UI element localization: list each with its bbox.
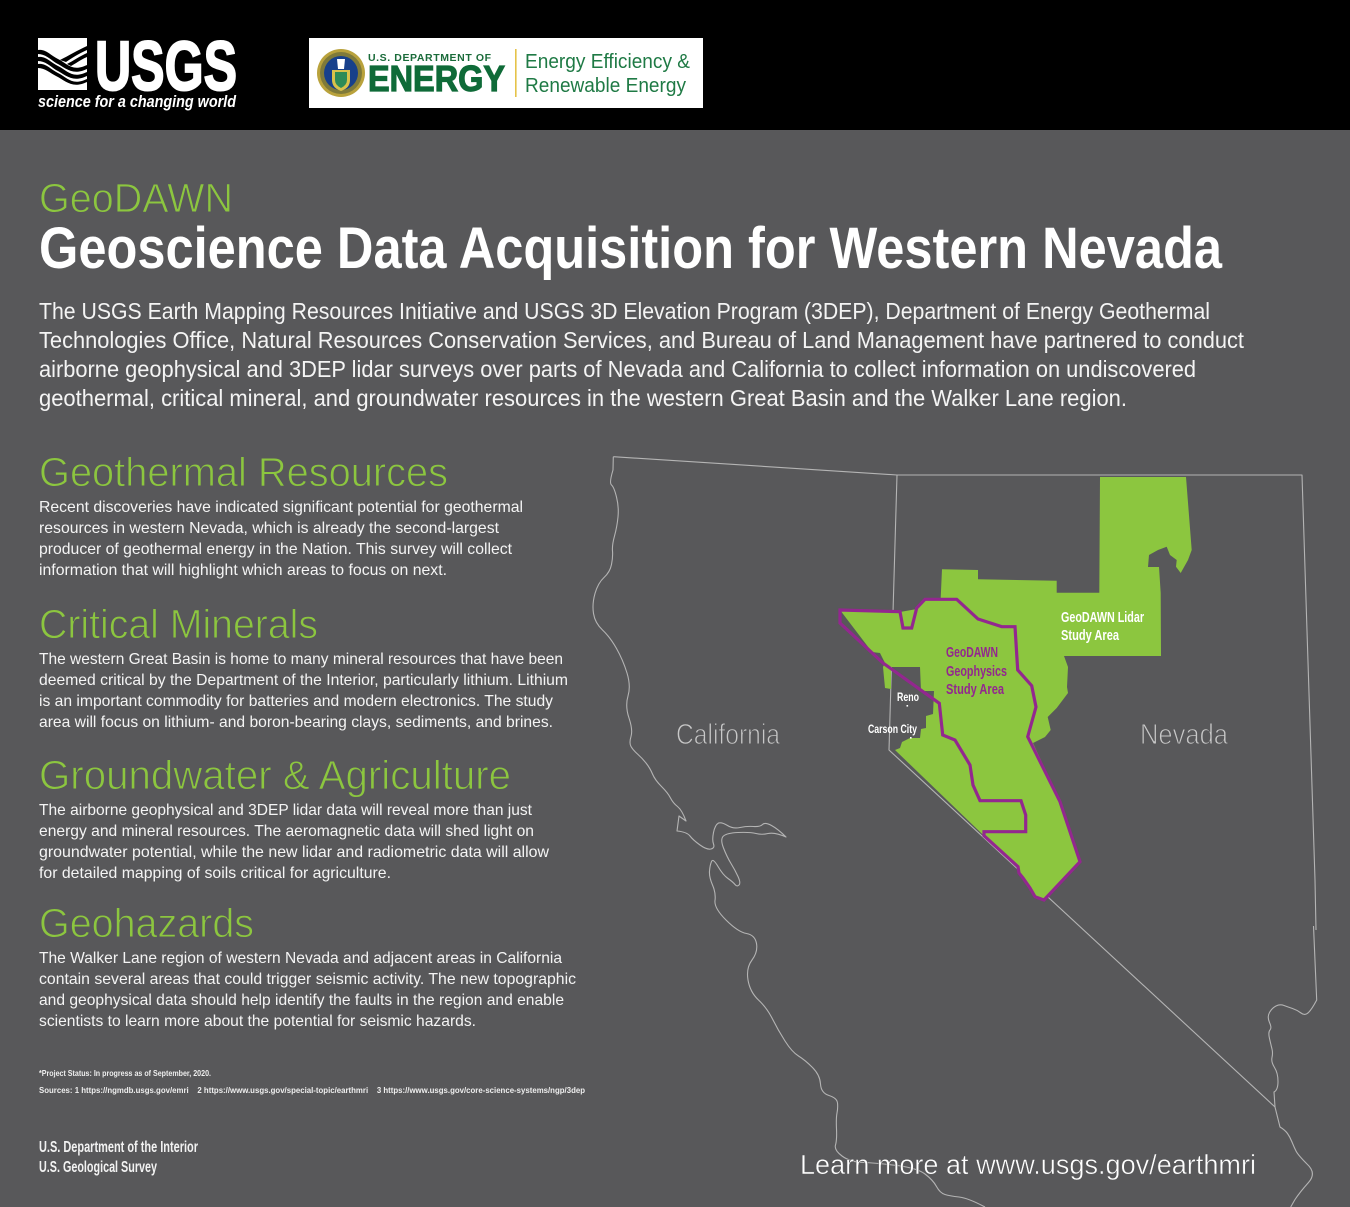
footnotes: *Project Status: In progress as of September, 2020. — [39, 1068, 211, 1078]
EERE office name: Energy Efficiency & — [525, 51, 691, 73]
EERE office name: Renewable Energy — [525, 75, 686, 97]
body text: for detailed mapping of soils critical for agriculture. — [39, 865, 391, 882]
call to action: Learn more at www.usgs.gov/earthmri — [800, 1149, 1256, 1180]
label: Reno: Reno — [897, 690, 919, 704]
label: California: California — [676, 719, 781, 751]
body text — [39, 950, 576, 1030]
USGS wordmark: USGS — [95, 27, 237, 105]
body text: Recent discoveries have indicated significant potential for geothermal — [39, 499, 523, 516]
footnotes: Sources: 1 https://ngmdb.usgs.gov/emri 2 https://www.usgs.gov/special-topic/earthmri 3 https://www.usgs.gov/core-science-systems/ngp/3dep — [39, 1085, 585, 1095]
panel: geothermal resources — [39, 449, 523, 579]
USGS tagline: science for a changing world — [38, 93, 237, 111]
label: geophysics study area — [946, 644, 1007, 698]
heading: Geothermal Resources — [39, 449, 448, 495]
map — [593, 457, 1317, 1207]
panel: groundwater and agriculture — [39, 752, 549, 882]
lidar study area — [840, 477, 1192, 900]
heading: Critical Minerals — [39, 601, 318, 647]
label: geophysics study area: Study Area — [946, 681, 1004, 698]
body text: energy and mineral resources. The aeromagnetic data will shed light on — [39, 823, 534, 840]
DOE logo — [309, 38, 703, 108]
label: lidar study area — [1061, 609, 1144, 644]
label: Carson City — [868, 722, 917, 739]
body text — [39, 499, 523, 579]
USGS logo — [38, 27, 237, 111]
icon: DOE seal — [317, 49, 365, 97]
intro paragraph — [39, 298, 1245, 411]
label: lidar study area: GeoDAWN Lidar — [1061, 609, 1144, 626]
body text: contain several areas that could trigger seismic activity. The new topographic — [39, 971, 576, 988]
title block — [39, 175, 1223, 281]
organization names — [39, 1139, 198, 1176]
body text: scientists to learn more about the potential for seismic hazards. — [39, 1013, 476, 1030]
icon: USGS waves — [38, 38, 87, 90]
EERE office name — [525, 51, 691, 97]
DOE ENERGY wordmark: ENERGY — [368, 58, 505, 99]
label: geophysics study area: Geophysics — [946, 663, 1007, 680]
label: Carson City: Carson City — [868, 722, 917, 736]
body text: and geophysical data should help identify the faults in the region and enable — [39, 992, 564, 1009]
panel: critical minerals — [39, 601, 568, 731]
label: geophysics study area: GeoDAWN — [946, 644, 998, 661]
organization names: U.S. Department of the Interior — [39, 1139, 198, 1156]
body text — [39, 651, 568, 731]
intro paragraph: geothermal, critical mineral, and groundwater resources in the western Great Basin and the Walker Lane region. — [39, 385, 1127, 411]
state outlines — [593, 457, 1317, 1207]
panel: geohazards — [39, 900, 576, 1030]
body text: deemed critical by the Department of the Interior, particularly lithium. Lithium — [39, 672, 568, 689]
heading: Groundwater & Agriculture — [39, 752, 511, 798]
geophysics study area outline — [840, 599, 1080, 900]
footnotes — [39, 1068, 585, 1095]
intro paragraph: Technologies Office, Natural Resources Conservation Services, and Bureau of Land Management have partnered to conduct — [39, 327, 1245, 353]
intro paragraph: airborne geophysical and 3DEP lidar surveys over parts of Nevada and California to collect information on undiscovered — [39, 356, 1196, 382]
body text: resources in western Nevada, which is already the second-largest — [39, 520, 500, 537]
header band — [0, 0, 1350, 130]
label: Nevada: Nevada — [1140, 719, 1229, 751]
body text: The western Great Basin is home to many mineral resources that have been — [39, 651, 563, 668]
body text: area will focus on lithium- and boron-bearing clays, sediments, and brines. — [39, 714, 553, 731]
label: Reno — [897, 690, 919, 707]
body text: is an important commodity for batteries and modern electronics. The study — [39, 693, 553, 710]
organization names: U.S. Geological Survey — [39, 1159, 157, 1176]
body text: producer of geothermal energy in the Nation. This survey will collect — [39, 541, 513, 558]
heading: Geohazards — [39, 900, 254, 946]
eyebrow: GeoDAWN: GeoDAWN — [39, 175, 233, 221]
DOE department line: U.S. DEPARTMENT OF — [368, 52, 492, 64]
body text: groundwater potential, while the new lidar and radiometric data will allow — [39, 844, 549, 861]
label: lidar study area: Study Area — [1061, 627, 1119, 644]
body text: information that will highlight which areas to focus on next. — [39, 562, 447, 579]
body text: The airborne geophysical and 3DEP lidar data will reveal more than just — [39, 802, 533, 819]
body text — [39, 802, 549, 882]
body text: The Walker Lane region of western Nevada and adjacent areas in California — [39, 950, 562, 967]
intro paragraph: The USGS Earth Mapping Resources Initiative and USGS 3D Elevation Program (3DEP), Department of Energy Geothermal — [39, 298, 1210, 324]
